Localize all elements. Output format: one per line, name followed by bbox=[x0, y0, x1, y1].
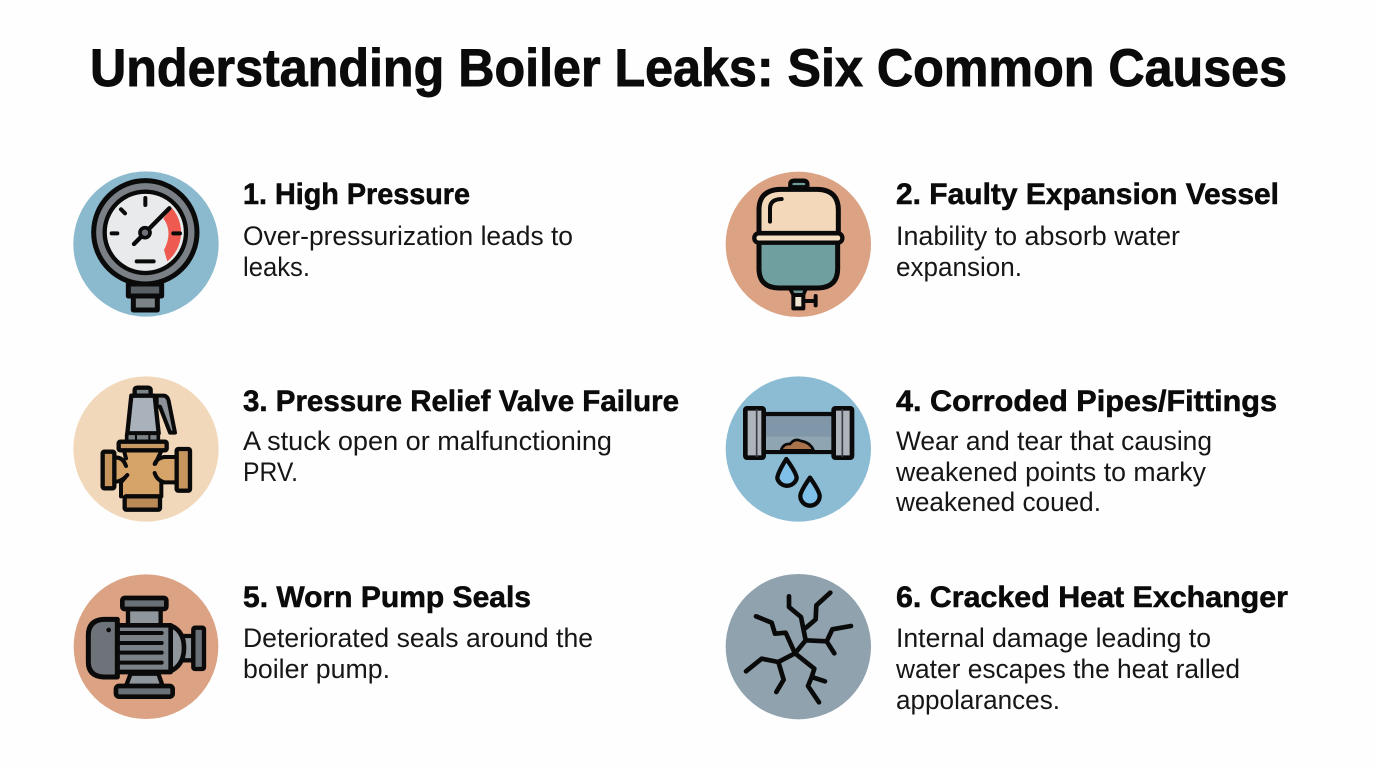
panel: cause 3 pressure relief valve failure bbox=[73, 376, 679, 522]
text block: weakened points to marky bbox=[895, 457, 1207, 487]
text block: boiler pump. bbox=[243, 654, 390, 684]
text block: Inability to absorb water bbox=[896, 221, 1180, 251]
heading: 5. Worn Pump Seals bbox=[243, 581, 531, 614]
text block: Internal damage leading to bbox=[896, 623, 1211, 653]
text block: A stuck open or malfunctioning bbox=[243, 426, 612, 456]
text block bbox=[243, 221, 573, 282]
icon: relief valve bbox=[73, 376, 219, 522]
panel: cause 6 cracked heat exchanger bbox=[726, 574, 1288, 719]
heading: 2. Faulty Expansion Vessel bbox=[896, 178, 1279, 211]
panel: cause 2 faulty expansion vessel bbox=[726, 172, 1279, 317]
heading: 3. Pressure Relief Valve Failure bbox=[243, 385, 679, 418]
text block bbox=[896, 221, 1180, 282]
text block: water escapes the heat ralled bbox=[895, 654, 1240, 684]
text block: weakened coued. bbox=[895, 487, 1101, 517]
icon: pressure gauge bbox=[73, 171, 219, 317]
text block: Wear and tear that causing bbox=[896, 426, 1212, 456]
heading: 1. High Pressure bbox=[243, 178, 470, 211]
text block: expansion. bbox=[896, 252, 1022, 282]
panel: cause 1 high pressure bbox=[73, 171, 573, 317]
text block: PRV. bbox=[243, 457, 298, 487]
icon: crack bbox=[726, 574, 871, 719]
icon: pump motor bbox=[74, 574, 218, 719]
text block: Deteriorated seals around the bbox=[243, 623, 593, 653]
text block: leaks. bbox=[243, 252, 310, 282]
text block bbox=[243, 623, 593, 684]
heading: 4. Corroded Pipes/Fittings bbox=[896, 385, 1277, 418]
text block bbox=[895, 426, 1212, 517]
panel: cause 4 corroded pipes bbox=[726, 376, 1277, 522]
panel: cause 5 worn pump seals bbox=[74, 574, 593, 719]
title: Understanding Boiler Leaks: Six Common Causes bbox=[90, 39, 1287, 98]
text block: Over-pressurization leads to bbox=[243, 221, 573, 251]
text block: appolarances. bbox=[896, 685, 1060, 715]
icon: expansion vessel bbox=[726, 172, 871, 317]
heading: 6. Cracked Heat Exchanger bbox=[896, 581, 1288, 614]
text block bbox=[243, 426, 612, 487]
icon: corroded pipe with drips bbox=[726, 376, 871, 522]
text block bbox=[895, 623, 1240, 715]
